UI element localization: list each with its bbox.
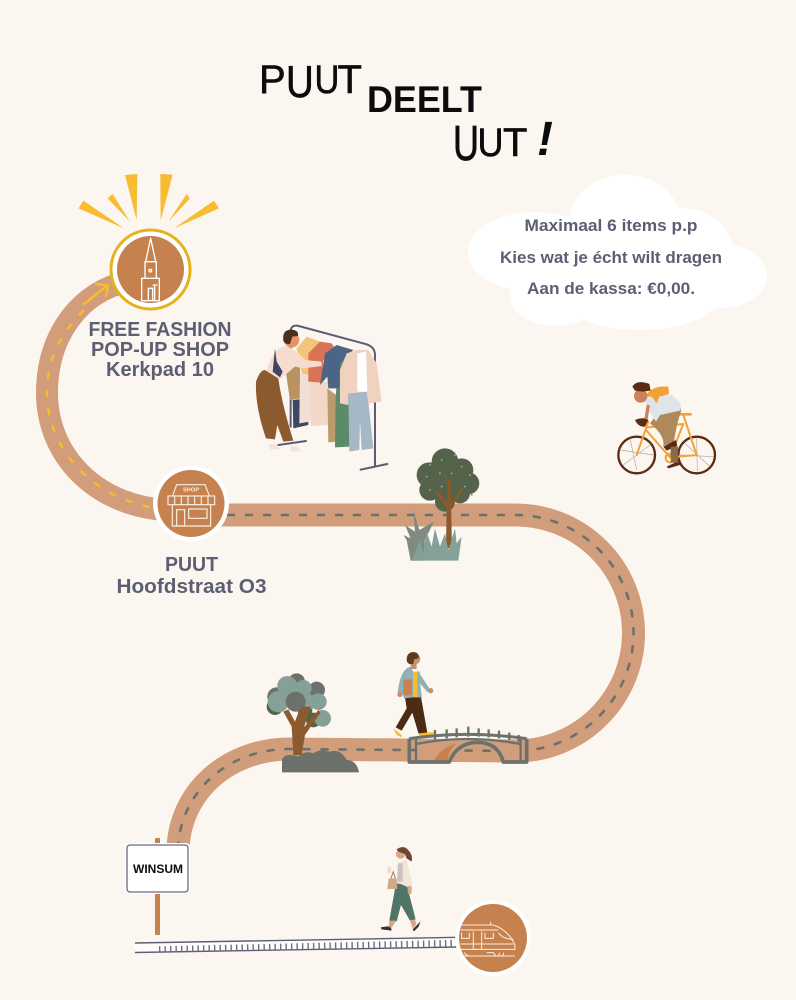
cloud shape bbox=[468, 175, 767, 330]
trunk bbox=[283, 707, 321, 755]
label: free fashion pop-up shop: POP-UP SHOP bbox=[91, 339, 229, 361]
illustration: woman walking bbox=[381, 847, 421, 931]
arrow bbox=[84, 284, 108, 304]
sign: winsum: WINSUM bbox=[133, 864, 183, 876]
shopper bbox=[256, 370, 293, 442]
cloud text: Aan de kassa: €0,00. bbox=[527, 279, 695, 298]
icon: shop: SHOP bbox=[183, 488, 199, 494]
icon: shop bbox=[153, 466, 229, 542]
illustration: bridge and walker bbox=[393, 652, 527, 762]
title: ! bbox=[537, 113, 553, 166]
illustration: cyclist bbox=[618, 382, 715, 473]
icon: train bbox=[455, 900, 531, 976]
grey dashes bbox=[178, 515, 634, 852]
canopy speckles bbox=[426, 454, 473, 496]
road: shop to bridge bbox=[178, 515, 634, 852]
title: T bbox=[338, 58, 362, 102]
cloud text: Kies wat je écht wilt dragen bbox=[500, 248, 722, 267]
label: puut hoofdstraat: PUUT bbox=[165, 554, 218, 576]
icon: church bbox=[111, 230, 190, 309]
title: T bbox=[503, 121, 527, 165]
garments bbox=[285, 363, 300, 400]
frame bbox=[637, 414, 697, 462]
label: free fashion pop-up shop: Kerkpad 10 bbox=[106, 359, 214, 381]
label: free fashion pop-up shop bbox=[88, 319, 232, 381]
rack bbox=[278, 326, 387, 470]
trunk bbox=[435, 480, 463, 548]
label: puut hoofdstraat: Hoofdstraat O3 bbox=[116, 576, 266, 598]
title: U bbox=[453, 117, 479, 171]
sign: winsum bbox=[125, 838, 190, 935]
title: DEELT bbox=[367, 79, 482, 120]
title bbox=[259, 56, 553, 171]
cloud text bbox=[500, 216, 722, 298]
railway track bbox=[135, 937, 458, 952]
wheels bbox=[618, 437, 715, 473]
tree canopy bbox=[417, 448, 479, 512]
title: U bbox=[314, 57, 339, 102]
rider bbox=[650, 403, 681, 446]
illustration: tree and bush bbox=[267, 673, 359, 772]
bridge bbox=[409, 727, 527, 762]
illustration: tree with grass bbox=[403, 448, 479, 561]
grass bbox=[403, 510, 434, 561]
yellow dashes bbox=[47, 311, 155, 508]
bush bbox=[282, 750, 359, 772]
label: free fashion pop-up shop: FREE FASHION bbox=[88, 319, 232, 341]
label: puut hoofdstraat bbox=[116, 554, 266, 598]
title: P bbox=[259, 58, 286, 102]
road: church to shop bbox=[47, 284, 165, 510]
title: U bbox=[286, 56, 314, 107]
cloud text: Maximaal 6 items p.p bbox=[524, 216, 698, 235]
foliage bbox=[267, 673, 325, 706]
title: U bbox=[478, 121, 504, 165]
sun rays bbox=[79, 174, 219, 228]
callout cloud bbox=[468, 175, 767, 330]
walker bbox=[393, 652, 433, 737]
illustration: clothing rack with shopper bbox=[256, 326, 387, 470]
route road bbox=[47, 284, 634, 852]
